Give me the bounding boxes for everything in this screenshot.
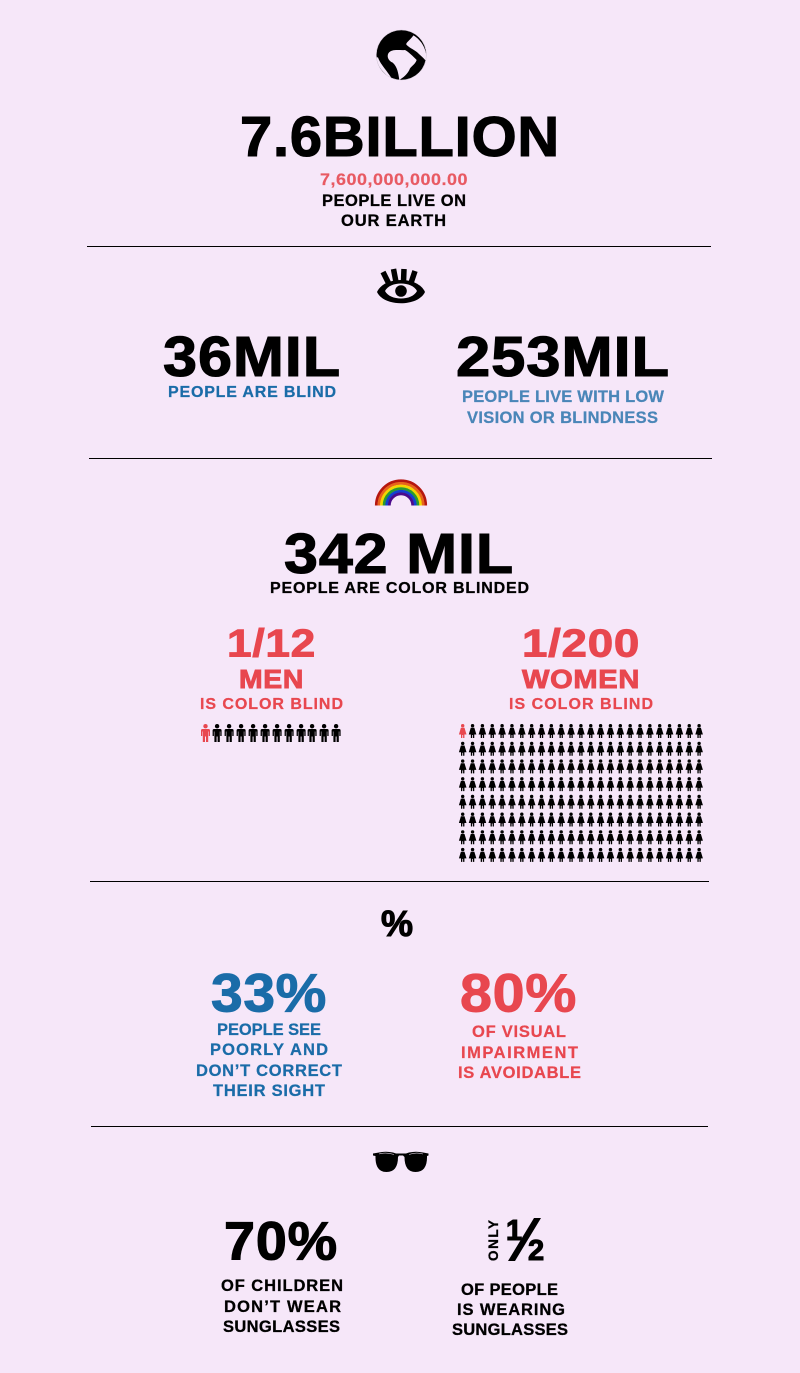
headline: 342 million: 342 MIL: [284, 522, 514, 586]
stat: only one half: [452, 1215, 568, 1339]
panel: blindness: [163, 269, 670, 427]
stat: men: 1/12: [227, 622, 316, 666]
caption: people are color blinded: PEOPLE ARE COLOR BLINDED: [270, 580, 529, 597]
stat: men: IS COLOR BLIND: [200, 696, 343, 713]
stat: only one half: SUNGLASSES: [452, 1321, 568, 1339]
stat: only one half: IS WEARING: [457, 1301, 565, 1319]
stat: 36 million: PEOPLE ARE BLIND: [168, 384, 336, 401]
panel: percentages: [196, 903, 581, 1100]
stat: only one half: OF PEOPLE: [461, 1281, 558, 1299]
stat: 80 percent: OF VISUAL: [472, 1023, 566, 1041]
stat: 70 percent: DON’T WEAR: [224, 1298, 341, 1316]
stat: 33 percent: POORLY AND: [210, 1041, 328, 1059]
stat: men: MEN: [239, 664, 304, 694]
stat: 80 percent: IS AVOIDABLE: [458, 1064, 581, 1082]
stat: 80 percent: [458, 964, 581, 1082]
stat: 33 percent: PEOPLE SEE: [217, 1021, 321, 1039]
icon: rainbow: [376, 481, 426, 506]
caption: people live on our earth: OUR EARTH: [341, 212, 446, 230]
vertical label: only: ONLY: [486, 1220, 501, 1261]
pictogram: 1 in 12 men: [201, 724, 341, 742]
panel: color blindness: [200, 481, 703, 862]
icon: globe: [375, 30, 427, 80]
number in full: 7,600,000,000.00: [320, 170, 468, 189]
stat: 253 million: 253MIL: [456, 325, 670, 389]
stat: women: IS COLOR BLIND: [509, 696, 653, 713]
stat: 33 percent: DON’T CORRECT: [196, 1062, 342, 1080]
stat: 80 percent: IMPAIRMENT: [461, 1044, 578, 1062]
stat: 70 percent: SUNGLASSES: [223, 1318, 340, 1336]
stat: 33 percent: THEIR SIGHT: [213, 1082, 325, 1100]
stat: 36 million: 36MIL: [163, 325, 341, 389]
stat: 33 percent: [196, 964, 342, 1100]
stat: 253 million: VISION OR BLINDNESS: [467, 409, 658, 427]
icon: eye with lashes: [377, 269, 425, 303]
stat: 70 percent: [221, 1212, 343, 1336]
fraction: one half: [506, 1215, 545, 1267]
fraction: one half: 2: [528, 1235, 545, 1267]
stat: 253 million: PEOPLE LIVE WITH LOW: [462, 388, 664, 406]
stat: women: WOMEN: [522, 664, 640, 694]
pictogram: 1 in 200 women: [459, 724, 703, 862]
caption: people live on our earth: PEOPLE LIVE ON: [322, 192, 466, 210]
stat: 70 percent: 70%: [224, 1212, 338, 1272]
stat: 253 million: [456, 325, 670, 427]
stat: 70 percent: OF CHILDREN: [221, 1277, 343, 1295]
stat: men: [200, 622, 343, 713]
stat: women: [509, 622, 653, 713]
icon: sunglasses: [373, 1152, 428, 1172]
panel: sunglasses: [221, 1152, 568, 1339]
icon: percent sign: %: [381, 903, 414, 944]
stat: 80 percent: 80%: [460, 964, 577, 1024]
stat: 33 percent: 33%: [211, 964, 327, 1024]
caption: people live on our earth: [322, 192, 466, 230]
panel: world population: [240, 30, 560, 230]
headline: 7.6 billion: 7.6BILLION: [240, 105, 560, 169]
stat: women: 1/200: [522, 622, 640, 666]
fraction: one half: 1: [506, 1215, 523, 1247]
